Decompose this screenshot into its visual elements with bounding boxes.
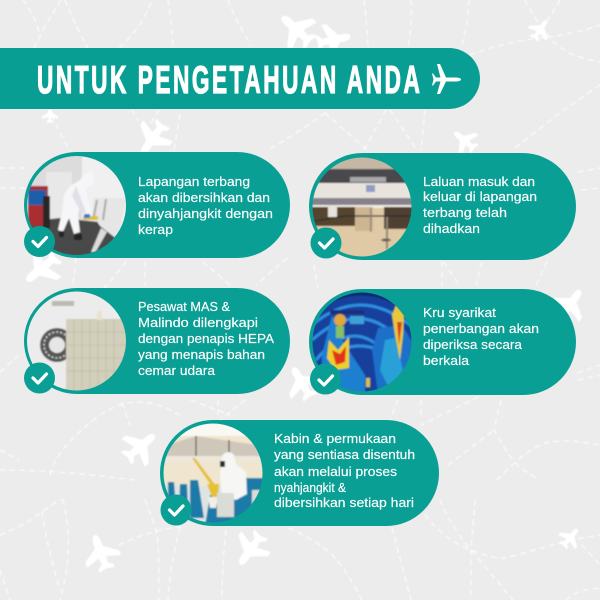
text block: Lapangan terbang	[138, 175, 250, 189]
pill	[24, 288, 290, 394]
text block	[423, 175, 537, 236]
text block: keluar di lapangan	[423, 190, 537, 204]
icon: check badge	[24, 362, 55, 394]
text block: Pesawat MAS &	[138, 300, 231, 314]
photo: worker cleaning seats	[25, 154, 129, 258]
panel: crew health checks	[309, 289, 576, 395]
text block: dihadkan	[423, 222, 480, 236]
text block: penerbangan akan	[423, 322, 539, 336]
text block: Laluan masuk dan	[423, 175, 535, 189]
pill	[24, 152, 290, 258]
title banner	[0, 48, 480, 109]
panel: cabin disinfection	[160, 420, 439, 526]
banner shape	[0, 48, 480, 109]
panel: airport disinfection	[24, 152, 290, 258]
text block: dinyahjangkit dengan	[138, 207, 273, 221]
photo: thermal scan of crew	[310, 290, 414, 394]
icon: check badge	[310, 228, 342, 258]
text block: berkala	[423, 354, 469, 368]
text block	[274, 432, 415, 510]
text block: yang menapis bahan	[138, 348, 265, 362]
icon: check badge	[24, 226, 55, 257]
text block: Malindo dilengkapi	[138, 316, 258, 330]
text block: yang sentiasa disentuh	[274, 448, 415, 462]
title: UNTUK PENGETAHUAN ANDA	[37, 58, 420, 102]
text block: dibersihkan setiap hari	[274, 496, 414, 510]
panel: HEPA filters	[24, 288, 290, 394]
text block: nyahjangkit &	[274, 481, 347, 495]
panel: entry and exit points	[309, 153, 576, 260]
pill	[309, 153, 576, 260]
text block	[138, 300, 275, 378]
icon: plane	[432, 64, 461, 94]
text block: terbang telah	[423, 206, 507, 220]
icon: check badge	[160, 494, 192, 526]
text block: akan dibersihkan dan	[138, 191, 270, 205]
text block: Kru syarikat	[423, 306, 497, 320]
text block: kerap	[138, 223, 173, 237]
pill	[160, 420, 439, 526]
text block: dengan penapis HEPA	[138, 332, 275, 346]
text block: Kabin & permukaan	[274, 432, 396, 446]
text block	[423, 306, 539, 368]
text block	[138, 175, 273, 237]
icon: check badge	[310, 364, 341, 394]
text block: cemar udara	[138, 364, 215, 378]
pill	[309, 289, 576, 395]
photo: airport check-in hall	[310, 155, 414, 259]
text block: diperiksa secara	[423, 338, 522, 352]
photo: HEPA filter and air purifier	[25, 289, 129, 393]
text block: akan melalui proses	[274, 465, 397, 479]
photo: cabin being sprayed	[164, 424, 262, 522]
